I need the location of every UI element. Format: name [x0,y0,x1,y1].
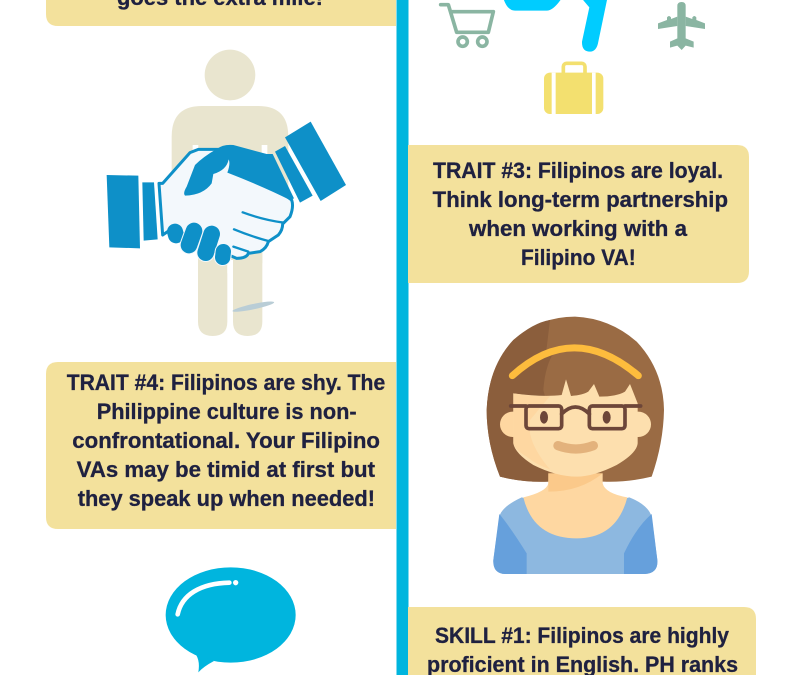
headband [512,348,638,376]
panel: trait 3: Filipino VA! [521,245,636,270]
hair [487,317,664,482]
icon: woman with glasses [487,317,664,574]
icon: person with handshake [107,50,346,336]
panel: trait 4: Philippine culture is non- [97,399,357,424]
panel: trait 4: TRAIT #4: Filipinos are shy. The [67,370,385,395]
stain mark [232,300,275,314]
center timeline bar [396,0,408,675]
glasses [511,406,641,429]
icon: blue arrow fragment [503,0,607,52]
ears [500,412,525,437]
panel: trait 3 [408,145,749,283]
panel: trait 3: Think long-term partnership [433,187,728,212]
panel: trait 4: VAs may be timid at first but [77,457,376,482]
panel: trait 4: confrontational. Your Filipino [72,428,380,453]
icons: travel and shopping [441,0,705,114]
icon: airplane [658,2,705,50]
panel: trait 3: when working with a [468,216,688,241]
neck and chest [523,473,627,538]
person silhouette [172,50,288,336]
panel: trait 4 [46,362,396,529]
shirt [493,497,657,574]
icon: suitcase [544,63,603,114]
mouth [558,446,593,449]
panel: trait 3: TRAIT #3: Filipinos are loyal. [433,158,723,183]
panel: trait 2 callout tail [46,0,396,26]
icon: speech bubble [166,567,296,672]
icon: shopping cart [441,5,493,46]
face [513,379,638,477]
handshake [107,122,346,258]
panel: trait 4: they speak up when needed! [78,486,375,511]
eyes [540,411,548,424]
panel: skill 1 [408,607,756,675]
panel: skill 1: SKILL #1: Filipinos are highly [435,623,730,648]
